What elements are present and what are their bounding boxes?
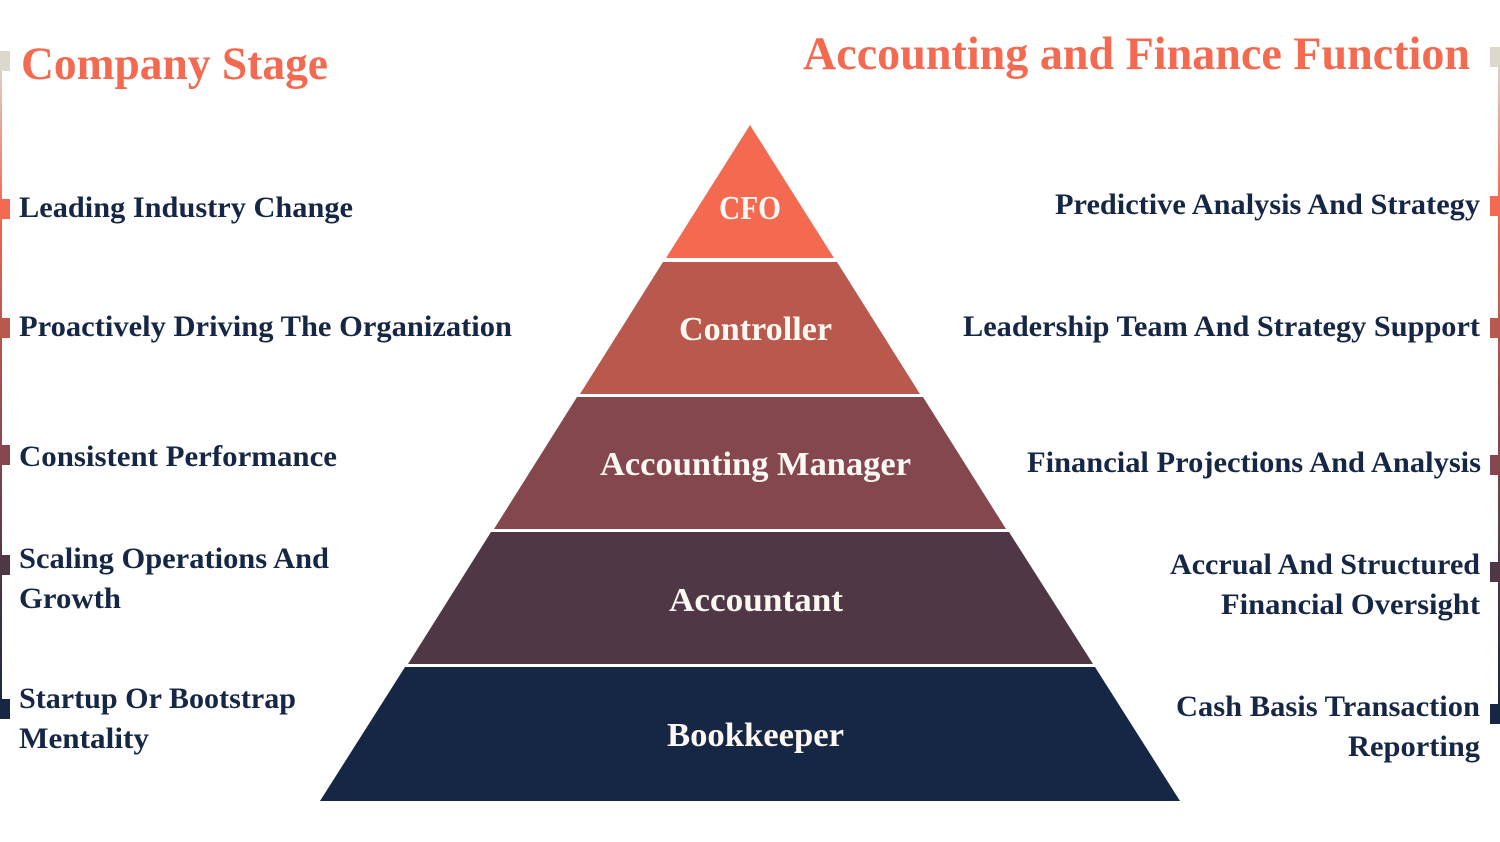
- tier: Bookkeeper: [320, 667, 1180, 801]
- title: Company Stage: Company Stage: [21, 38, 328, 90]
- right label: Accrual And Structured Financial Oversight: Financial Oversight: [1221, 588, 1480, 621]
- tier: Accountant: Accountant: [669, 582, 844, 619]
- left label: Scaling Operations And Growth: [19, 542, 329, 615]
- pyramid: [320, 125, 1180, 801]
- left label: Startup Or Bootstrap Mentality: Mentality: [19, 722, 149, 755]
- right label: Leadership Team And Strategy Support: Leadership Team And Strategy Support: [963, 310, 1480, 343]
- right label: Predictive Analysis And Strategy: Predictive Analysis And Strategy: [1055, 188, 1480, 221]
- right label: Cash Basis Transaction Reporting: Cash Basis Transaction: [1176, 690, 1480, 723]
- right label: Accrual And Structured Financial Oversight: [1170, 548, 1480, 621]
- left label: Startup Or Bootstrap Mentality: Startup Or Bootstrap: [19, 682, 296, 715]
- tier: Accounting Manager: Accounting Manager: [600, 446, 911, 483]
- tier: CFO: CFO: [719, 190, 781, 227]
- left label: Proactively Driving The Organization: Proactively Driving The Organization: [19, 310, 512, 343]
- tier: Bookkeeper: Bookkeeper: [667, 717, 844, 754]
- left label: Scaling Operations And Growth: Scaling Operations And: [19, 542, 329, 575]
- left label: Startup Or Bootstrap Mentality: [19, 682, 296, 755]
- right label: Cash Basis Transaction Reporting: [1176, 690, 1480, 763]
- tier: CFO: [666, 125, 834, 258]
- left label: Leading Industry Change: Leading Industry Change: [19, 191, 353, 224]
- right timeline: [1490, 47, 1500, 724]
- tier: Controller: [580, 262, 920, 394]
- left timeline: [0, 51, 10, 719]
- title: Accounting and Finance Function: Accounting and Finance Function: [803, 28, 1470, 80]
- right label: Accrual And Structured Financial Oversight: Accrual And Structured: [1170, 548, 1480, 581]
- tier: Accounting Manager: [494, 397, 1006, 529]
- tier: Accountant: [408, 532, 1093, 664]
- right label: Financial Projections And Analysis: Financial Projections And Analysis: [1027, 446, 1481, 479]
- left label: Consistent Performance: Consistent Performance: [19, 440, 337, 473]
- left label: Scaling Operations And Growth: Growth: [19, 582, 121, 615]
- right label: Cash Basis Transaction Reporting: Reporting: [1348, 730, 1480, 763]
- tier: Controller: Controller: [679, 311, 832, 348]
